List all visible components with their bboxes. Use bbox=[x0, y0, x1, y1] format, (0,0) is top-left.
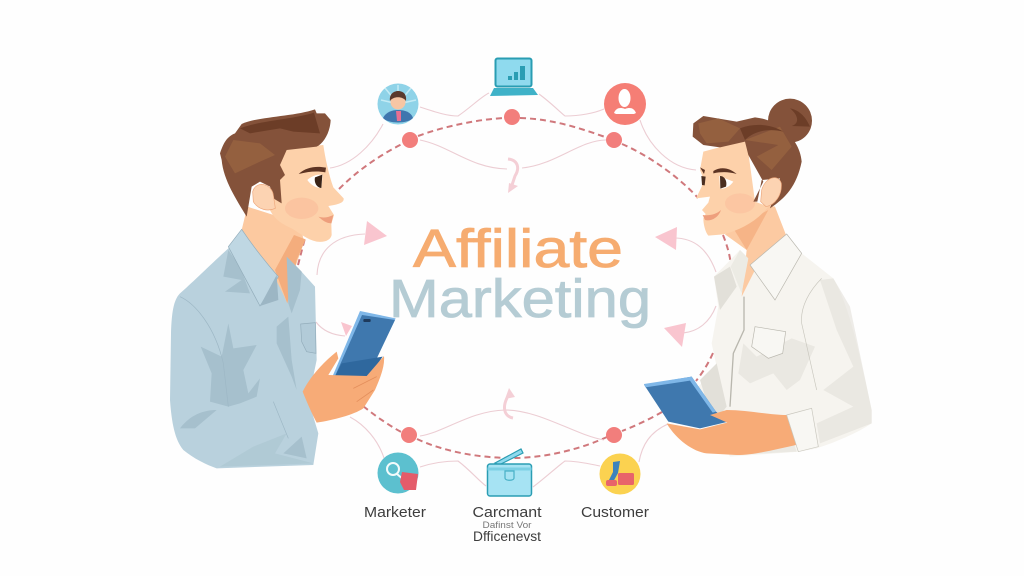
icon: laptop with chart bbox=[490, 58, 538, 96]
arrow: bottom curl bbox=[505, 388, 515, 418]
arrow: left upper bbox=[364, 221, 387, 245]
pocket bbox=[301, 323, 316, 353]
label: merchant block bbox=[472, 505, 542, 544]
label: merchant block: Carcmant bbox=[472, 505, 542, 521]
label: Marketer: Marketer bbox=[364, 505, 426, 521]
shirt shadows bbox=[700, 267, 872, 455]
pocket bbox=[752, 327, 786, 358]
hand bbox=[667, 410, 796, 455]
eyebrow bbox=[700, 167, 737, 174]
face bbox=[696, 140, 768, 236]
collar bbox=[228, 229, 278, 306]
tablet bbox=[644, 377, 728, 428]
button placket bbox=[730, 297, 744, 407]
hair bun bbox=[768, 99, 812, 143]
label: Customer: Customer bbox=[581, 505, 649, 521]
hair bbox=[693, 116, 802, 208]
hair bbox=[220, 109, 331, 217]
eyebrow bbox=[299, 167, 326, 174]
node: bottom right bbox=[606, 427, 622, 443]
arrow: right upper bbox=[655, 227, 677, 250]
shirt bbox=[170, 229, 318, 468]
cheek blush bbox=[725, 193, 755, 213]
shirt bbox=[698, 234, 872, 457]
neck bbox=[725, 203, 787, 297]
title line: Affiliate: Affiliate bbox=[413, 219, 623, 279]
arrow: left lower bbox=[341, 322, 352, 336]
label: merchant block: Dfficenevst bbox=[473, 529, 541, 544]
dashed affiliate cycle ring bbox=[298, 118, 731, 458]
person: left man with phone bbox=[170, 109, 396, 468]
icon: person avatar bbox=[378, 84, 418, 124]
node: top centre bbox=[504, 109, 520, 125]
cuff bbox=[787, 408, 818, 452]
ear bbox=[253, 184, 275, 210]
label: merchant block: Dafinst Vor bbox=[482, 520, 532, 530]
arrow: right lower bbox=[664, 323, 686, 347]
sleeve seam bbox=[180, 297, 288, 438]
node: top left bbox=[402, 132, 418, 148]
eye bbox=[719, 176, 733, 189]
node: bottom left bbox=[401, 427, 417, 443]
title line: Marketing: Marketing bbox=[389, 269, 651, 329]
cheek blush bbox=[285, 198, 318, 219]
icon: magnifier badge bbox=[378, 452, 418, 494]
hand bbox=[303, 352, 384, 423]
icon: customer badge bbox=[600, 454, 640, 494]
collar bbox=[750, 234, 802, 300]
title bbox=[389, 219, 651, 329]
arrow: top curl bbox=[508, 159, 518, 193]
ear bbox=[761, 178, 781, 207]
sleeve seam bbox=[801, 278, 822, 390]
eye bbox=[307, 175, 323, 188]
node: top right bbox=[606, 132, 622, 148]
icon: open box bbox=[488, 449, 532, 496]
neck bbox=[242, 207, 304, 303]
person: right woman with tablet bbox=[644, 99, 872, 457]
icon: user in red circle bbox=[604, 83, 646, 125]
mouth bbox=[318, 215, 333, 223]
mouth bbox=[703, 210, 721, 220]
shirt shadows bbox=[180, 250, 313, 467]
phone bbox=[332, 311, 396, 378]
face bbox=[267, 145, 344, 242]
thin connector lines bbox=[316, 93, 716, 487]
